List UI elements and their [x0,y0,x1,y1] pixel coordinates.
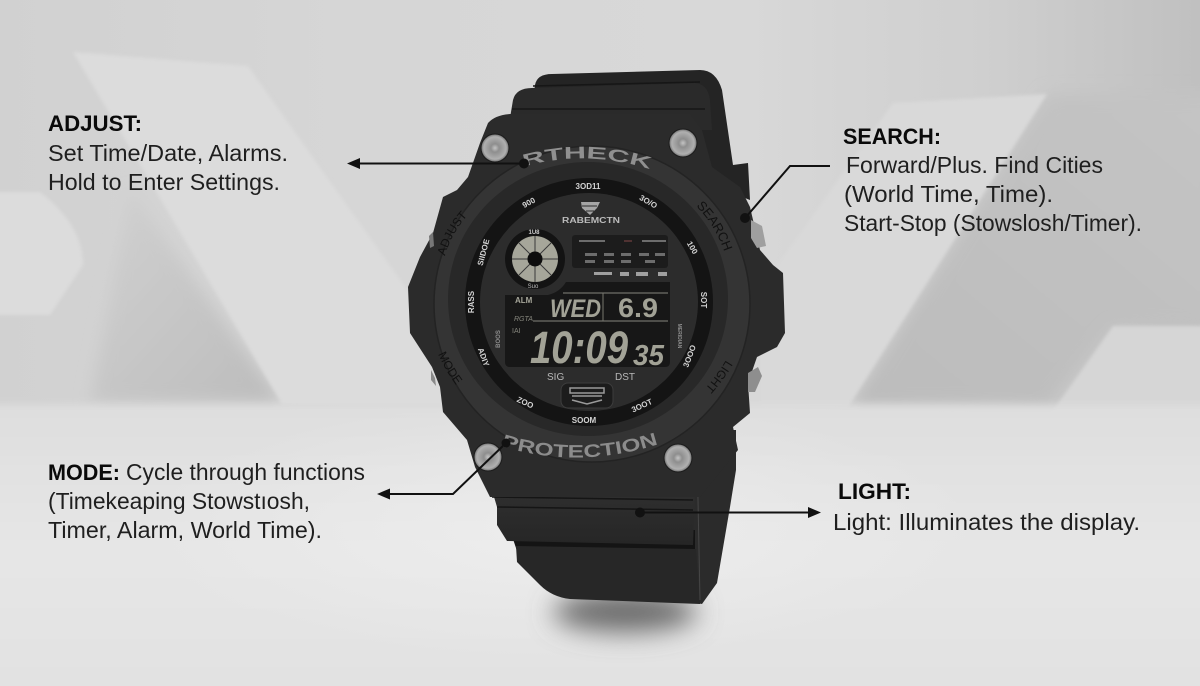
screws [474,129,697,472]
arrow: light [635,507,821,518]
heading: mode: MODE: [48,460,120,485]
text: search description: Start-Stop (Stowslosh/Timer). [844,210,1142,236]
watch [408,70,785,604]
LCD screen: RGTA [514,316,533,323]
callout: search [843,124,1142,236]
upper strap [510,70,750,200]
scale labels: SOOM [572,416,597,425]
scale labels: SOT [699,292,708,308]
upper right panel [572,235,668,276]
SIG DST: DST [615,372,635,383]
text: mode description [48,459,365,543]
text: mode description: (Timekeaping Stowstıosh, [48,488,310,514]
SIG DST [547,372,635,383]
scale labels: RASS [467,290,476,313]
brand logo [562,202,620,225]
watch: SEARCH [698,202,732,250]
scale labels: ZOO [515,395,535,410]
arrow: adjust [347,158,529,169]
text: mode description: Timer, Alarm, World Time). [48,517,322,543]
callout: light [833,479,1140,535]
heading: search: SEARCH: [843,124,941,149]
text: adjust description: Set Time/Date, Alarms. [48,140,288,166]
LCD screen: 6.9 [618,293,658,323]
scale labels: 3OOO [681,344,698,369]
arrow: search [740,166,830,223]
text: light description: Light: Illuminates the display. [833,509,1140,535]
LCD screen: IAI [512,328,521,335]
LCD screen: ALM [515,296,533,305]
text: search description [844,152,1142,236]
scale labels: 3O/O [638,193,659,211]
scale labels: 3OOT [630,397,654,414]
inner slope [448,162,728,436]
watch: ADJUST [438,210,466,256]
scale labels: 100 [685,240,700,256]
case [408,114,785,497]
scale labels: SIIDOE [476,237,492,267]
scale labels: 3OD11 [576,182,601,191]
lower strap [492,430,736,604]
crown buttons [429,220,766,392]
heading: adjust: ADJUST: [48,111,142,136]
dial [480,193,698,411]
callout: mode [48,459,365,543]
scale labels: BOOS [496,330,502,348]
chapter ring [465,178,713,426]
text: search description: (World Time, Time). [844,181,1053,207]
watch: PROTECTION [504,432,657,458]
watch: LIGHT [707,361,732,394]
text: mode description: Cycle through functions [126,459,365,485]
SIG DST: SIG [547,372,564,383]
scale labels [467,182,708,425]
watch shadow [553,592,697,632]
arrow: mode [377,438,510,500]
bezel [434,146,750,462]
scale labels: ADIY [476,347,491,368]
text: adjust description: Hold to Enter Settings. [48,169,280,195]
scale labels: MERIDIAN [676,324,682,349]
watch: MODE [438,352,462,384]
scale labels: 900 [521,195,537,210]
sub dial: 1U8 [528,230,540,236]
text: adjust description [48,140,288,195]
bezel text: RTHECK [523,146,652,169]
brand logo: RABEMCTN [562,216,620,225]
bottom emblem [561,383,613,408]
heading: light: LIGHT: [838,479,911,504]
LCD screen: 10:09 [530,322,628,373]
sub dial: Suo [528,284,539,290]
LCD screen: WED [550,295,601,323]
LCD screen: 35 [633,340,665,372]
LCD screen [505,282,670,373]
sub dial [505,229,565,290]
text: search description: Forward/Plus. Find Cities [846,152,1103,178]
callout: adjust [48,111,288,195]
